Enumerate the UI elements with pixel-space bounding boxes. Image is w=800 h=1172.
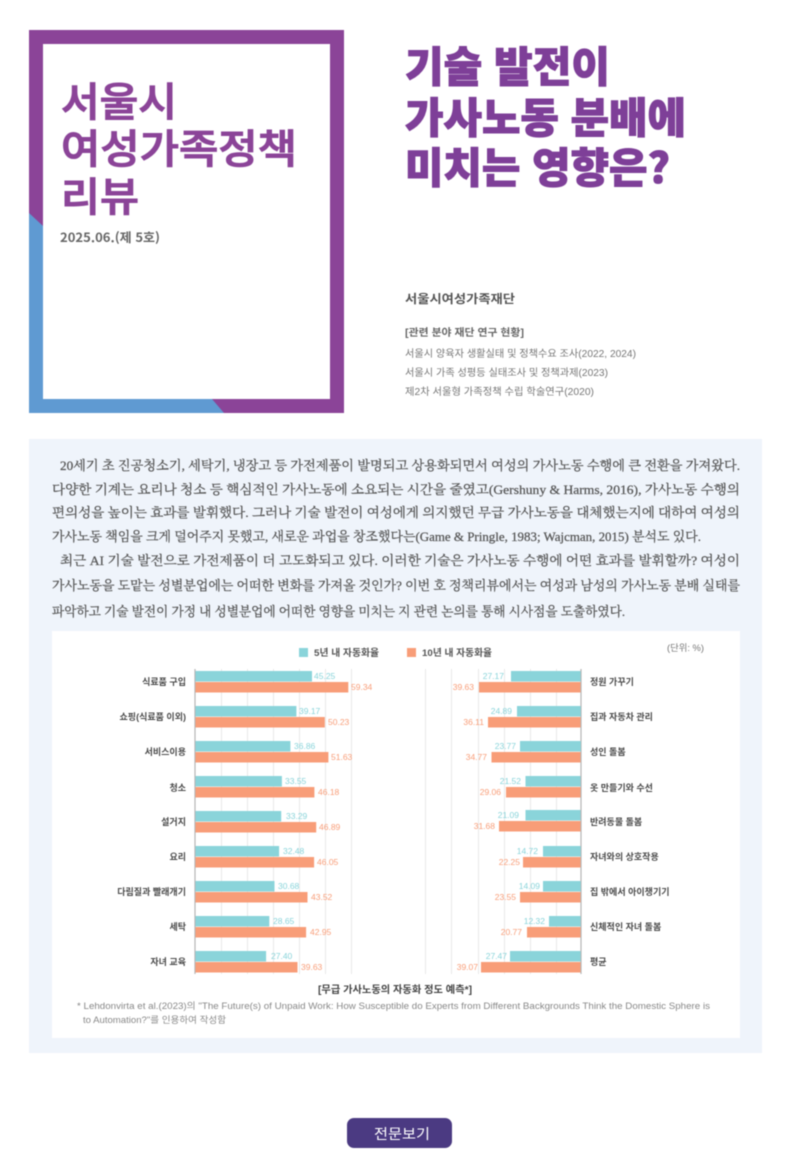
- row: 다림질과 빨래개기: 다림질과 빨래개기: [117, 886, 186, 897]
- row: 집 밖에서 아이챙기기: 23.55: [495, 892, 516, 902]
- row: 반려동물 돌봄: 21.09: [498, 810, 519, 820]
- row: 성인 돌봄: 성인 돌봄: [590, 747, 626, 757]
- row: 성인 돌봄: 34.77: [466, 752, 487, 762]
- row: 식료품 구입: 식료품 구입: [142, 676, 186, 687]
- heading: main title: 가사노동 분배에: [405, 85, 686, 146]
- row: 정원 가꾸기: 정원 가꾸기: [590, 676, 634, 687]
- legend: [299, 647, 492, 659]
- row: 신체적인 자녀 돌봄: 20.77: [501, 927, 522, 937]
- row: 정원 가꾸기: [453, 671, 634, 692]
- row: 세탁: [169, 916, 332, 938]
- row: 자녀 교육: 27.40: [271, 951, 293, 961]
- text: unit: (단위: %): [667, 643, 704, 653]
- row: 정원 가꾸기: 39.63: [453, 682, 474, 692]
- text block: introduction: 편의성을 높이는 효과를 발휘했다. 그러나 기술 발전이 여성에게 의지했던 무급 가사노동을 대체했는지에 대하여 여성의: [52, 505, 740, 520]
- row: 자녀 교육: [150, 951, 323, 972]
- row: 집과 자동차 관리: 집과 자동차 관리: [590, 711, 653, 722]
- text block: introduction: 20세기 초 진공청소기, 세탁기, 냉장고 등 가전제품이 발명되고 상용화되면서 여성의 가사노동 수행에 큰 전환을 가져왔다.: [60, 458, 740, 473]
- row: 청소: [169, 776, 340, 798]
- heading: publication title: [61, 81, 297, 220]
- text block: introduction: 가사노동 책임을 크게 덜어주지 못했고, 새로운 과업을 창조했다는(Game & Pringle, 1983; Wajcman, 2015) 분석도 있다.: [52, 529, 701, 544]
- row: 요리: 32.48: [283, 846, 305, 856]
- row: 집과 자동차 관리: 24.89: [491, 706, 512, 716]
- button: view full text: [347, 1118, 452, 1148]
- row: 옷 만들기와 수선: 옷 만들기와 수선: [590, 782, 653, 793]
- bar chart: left: [117, 669, 373, 974]
- row: 요리: 요리: [169, 852, 186, 862]
- row: 식료품 구입: 45.25: [314, 671, 336, 681]
- row: 청소: 청소: [169, 782, 186, 793]
- row: 자녀와의 상호작용: 자녀와의 상호작용: [590, 851, 659, 862]
- row: 자녀와의 상호작용: 22.25: [499, 857, 520, 867]
- text block: introduction: 최근 AI 기술 발전으로 가전제품이 더 고도화되고 있다. 이러한 기술은 가사노동 수행에 어떤 효과를 발휘할까? 여성이: [60, 553, 740, 568]
- row: 식료품 구입: 59.34: [351, 682, 373, 692]
- panel: chart card: [52, 631, 740, 1038]
- heading: main title: 기술 발전이: [405, 34, 610, 95]
- row: 평균: 39.07: [457, 962, 478, 972]
- legend: 10년 내 자동화율: [422, 647, 492, 659]
- text: related research list: 서울시 양육자 생활실태 및 정책수요 조사(2022, 2024): [405, 347, 636, 360]
- text: related research list: 제2차 서울형 가족정책 수립 학술연구(2020): [405, 385, 594, 398]
- footnote: * Lehdonvirta et al.(2023)의 "The Future(s) of Unpaid Work: How Susceptible do Experts from Different Backgrounds Think the Domestic Sphere is: [77, 1001, 711, 1011]
- row: 신체적인 자녀 돌봄: [501, 916, 661, 938]
- text: issue date: 2025.06.(제 5호): [60, 227, 160, 246]
- legend: 5년 내 자동화율: [314, 647, 379, 659]
- heading: main title: [405, 34, 686, 196]
- row: 다림질과 빨래개기: 43.52: [311, 892, 333, 902]
- row: 세탁: 42.95: [310, 927, 332, 937]
- row: 쇼핑(식료품 이외): 39.17: [299, 706, 321, 716]
- row: 성인 돌봄: [466, 741, 626, 762]
- row: 요리: [169, 846, 339, 868]
- heading: publication title: 여성가족정책: [61, 128, 297, 172]
- row: 서비스이용: 51.63: [331, 752, 353, 762]
- row: 집과 자동차 관리: [463, 706, 653, 728]
- text: related research list: [관련 분야 재단 연구 현황]: [405, 326, 524, 339]
- row: 설거지: 33.29: [286, 811, 308, 821]
- row: 요리: 46.05: [317, 857, 339, 867]
- row: 옷 만들기와 수선: 21.52: [500, 776, 521, 786]
- row: 설거지: [161, 811, 341, 832]
- chart caption: [무급 가사노동의 자동화 정도 예측*]: [318, 983, 472, 996]
- row: 세탁: 28.65: [273, 916, 295, 926]
- row: 옷 만들기와 수선: 29.06: [480, 787, 501, 797]
- row: 설거지: 설거지: [161, 816, 186, 827]
- row: 청소: 33.55: [285, 776, 307, 786]
- panel: cover frame: [29, 30, 344, 413]
- footnote: to Automation?"를 인용하여 작성함: [83, 1014, 226, 1025]
- text block: introduction: 가사노동을 도맡는 성별분업에는 어떠한 변화를 가져올 것인가? 이번 호 정책리뷰에서는 여성과 남성의 가사노동 분배 실태를: [52, 578, 740, 593]
- row: 세탁: 세탁: [169, 921, 187, 932]
- bar chart: right: [426, 669, 670, 974]
- row: 성인 돌봄: 23.77: [495, 741, 516, 751]
- row: 평균: 평균: [590, 957, 607, 967]
- row: 반려동물 돌봄: 31.68: [474, 821, 495, 831]
- text: related research list: 서울시 가족 성평등 실태조사 및 정책과제(2023): [405, 367, 608, 379]
- row: 다림질과 빨래개기: 30.68: [278, 881, 300, 891]
- row: 쇼핑(식료품 이외): [120, 706, 350, 728]
- row: 청소: 46.18: [318, 787, 340, 797]
- row: 서비스이용: 36.86: [294, 741, 316, 751]
- row: 신체적인 자녀 돌봄: 신체적인 자녀 돌봄: [590, 921, 661, 932]
- row: 설거지: 46.89: [319, 822, 341, 832]
- button: view full text: 전문보기: [374, 1126, 430, 1142]
- text: organisation name: 서울시여성가족재단: [405, 291, 515, 306]
- heading: main title: 미치는 영향은?: [405, 135, 670, 196]
- row: 평균: 27.47: [486, 951, 507, 961]
- row: 서비스이용: [145, 741, 353, 762]
- row: 반려동물 돌봄: 반려동물 돌봄: [590, 816, 642, 827]
- row: 집과 자동차 관리: 36.11: [463, 717, 484, 727]
- row: 식료품 구입: [142, 671, 373, 692]
- row: 자녀와의 상호작용: [499, 846, 659, 868]
- row: 자녀와의 상호작용: 14.72: [517, 846, 538, 856]
- heading: publication title: 리뷰: [61, 176, 139, 220]
- row: 반려동물 돌봄: [474, 810, 642, 832]
- row: 자녀 교육: 자녀 교육: [150, 956, 186, 967]
- row: 신체적인 자녀 돌봄: 12.32: [524, 916, 545, 926]
- text block: introduction: 다양한 기계는 요리나 청소 등 핵심적인 가사노동에 소요되는 시간을 줄였고(Gershuny & Harms, 2016), 가사노동 수행의: [52, 482, 740, 497]
- row: 옷 만들기와 수선: [480, 776, 653, 798]
- row: 집 밖에서 아이챙기기: 집 밖에서 아이챙기기: [590, 886, 670, 897]
- row: 쇼핑(식료품 이외): 쇼핑(식료품 이외): [120, 711, 186, 722]
- row: 쇼핑(식료품 이외): 50.23: [328, 717, 350, 727]
- row: 집 밖에서 아이챙기기: [495, 881, 670, 902]
- row: 다림질과 빨래개기: [117, 881, 333, 902]
- text block: introduction: [52, 458, 740, 619]
- row: 정원 가꾸기: 27.17: [483, 671, 504, 681]
- text block: introduction: 파악하고 기술 발전이 가정 내 성별분업에 어떠한 영향을 미치는 지 관련 논의를 통해 시사점을 도출하였다.: [52, 604, 625, 619]
- row: 자녀 교육: 39.63: [301, 962, 323, 972]
- footnote: [77, 1001, 711, 1025]
- row: 집 밖에서 아이챙기기: 14.09: [519, 881, 540, 891]
- row: 평균: [457, 951, 607, 972]
- row: 서비스이용: 서비스이용: [145, 746, 186, 757]
- heading: publication title: 서울시: [61, 81, 177, 125]
- text: related research list: [405, 326, 636, 398]
- panel: summary background: [29, 439, 762, 1053]
